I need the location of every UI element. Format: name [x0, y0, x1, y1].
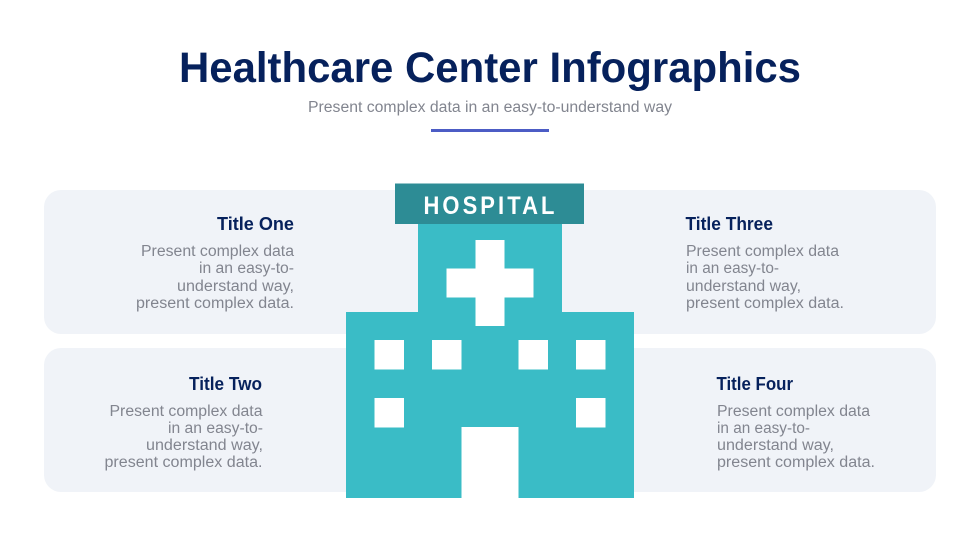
- sign label: HOSPITAL: [424, 192, 558, 220]
- panel background: [44, 348, 444, 492]
- text block: title three body: present complex data.: [686, 295, 844, 312]
- panel: title one: [44, 190, 444, 334]
- panel: title four: [536, 348, 936, 492]
- panel background: [536, 348, 936, 492]
- text block: title four body: present complex data.: [717, 454, 875, 471]
- text block: title two body: [104, 403, 263, 471]
- text block: title two body: in an easy-to-: [168, 420, 263, 437]
- text block: title four body: [717, 403, 875, 471]
- panel background: [44, 190, 444, 334]
- text block: title two body: understand way,: [146, 437, 263, 454]
- heading: title two: Title Two: [189, 373, 262, 394]
- windows: [374, 340, 606, 428]
- text block: title four body: understand way,: [717, 437, 834, 454]
- text block: title two body: present complex data.: [104, 454, 262, 471]
- icon: hospital building: [346, 184, 634, 498]
- text block: title three body: understand way,: [686, 278, 801, 295]
- panel background: [536, 190, 936, 334]
- panel: title three: [536, 190, 936, 334]
- heading: title one: Title One: [217, 213, 294, 234]
- text block: title three body: [686, 243, 844, 312]
- text block: title one body: in an easy-to-: [199, 260, 294, 277]
- hospital sign: [395, 184, 584, 224]
- title underline: [431, 129, 549, 132]
- text block: title one body: understand way,: [177, 278, 294, 295]
- text block: title one body: [136, 243, 294, 312]
- text block: title three body: Present complex data: [686, 243, 839, 260]
- door: [462, 427, 518, 498]
- icon: medical cross: [446, 240, 534, 326]
- building body: [346, 224, 634, 498]
- title: Healthcare Center Infographics: [179, 44, 801, 92]
- panel: title two: [44, 348, 444, 492]
- heading: title four: Title Four: [716, 373, 793, 394]
- subtitle: Present complex data in an easy-to-understand way: [308, 99, 672, 116]
- text block: title one body: present complex data.: [136, 295, 294, 312]
- text block: title two body: Present complex data: [110, 403, 263, 420]
- text block: title four body: Present complex data: [717, 403, 870, 420]
- text block: title four body: in an easy-to-: [717, 420, 810, 437]
- text block: title three body: in an easy-to-: [686, 260, 779, 277]
- text block: title one body: Present complex data: [141, 243, 294, 260]
- heading: title three: Title Three: [686, 213, 773, 234]
